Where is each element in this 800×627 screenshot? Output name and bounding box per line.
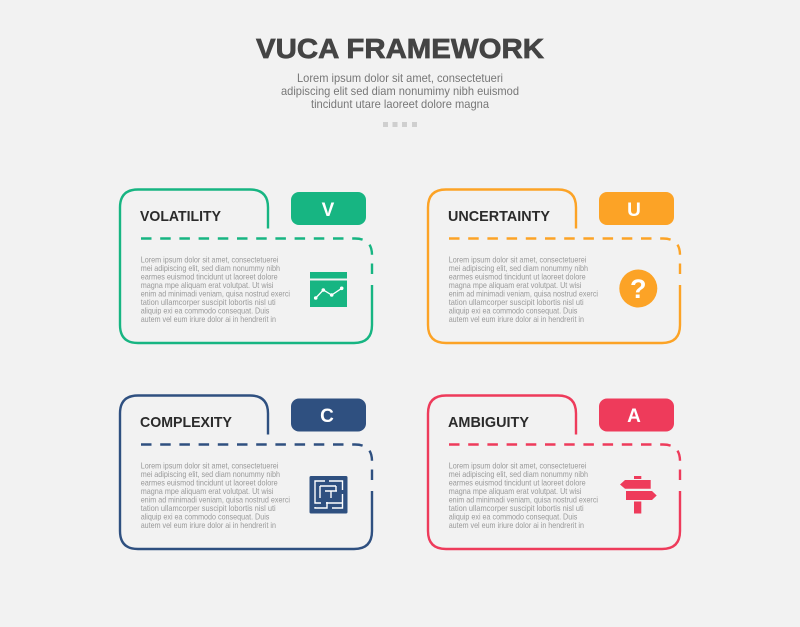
body text: magna mpe aliquam erat volutpat. Ut wisi xyxy=(141,280,274,290)
subtitle text block: adipiscing elit sed diam nonumimy nibh euismod xyxy=(281,84,519,98)
card outline xyxy=(120,190,372,343)
badge U: U xyxy=(627,200,641,221)
body text: enim ad minimadi veniam, quisa nostrud exerci xyxy=(449,494,598,504)
badge A: A xyxy=(627,406,641,427)
pagination dots xyxy=(383,122,417,127)
body text: autem vel eum iriure dolor ai in hendrerit in xyxy=(141,520,276,530)
icon: signpost xyxy=(620,476,657,514)
icon: question mark: ? xyxy=(630,274,647,304)
body text: magna mpe aliquam erat volutpat. Ut wisi xyxy=(449,280,582,290)
panel: volatility xyxy=(120,190,372,343)
heading: AMBIGUITY xyxy=(448,414,529,431)
body text xyxy=(141,254,290,324)
card outline xyxy=(120,396,372,549)
badge U xyxy=(599,192,674,225)
body text: enim ad minimadi veniam, quisa nostrud exerci xyxy=(141,494,290,504)
body text: aliquip exi ea commodo consequat. Duis xyxy=(449,305,577,315)
card outline xyxy=(428,190,680,343)
body text: enim ad minimadi veniam, quisa nostrud exerci xyxy=(141,288,290,298)
body text xyxy=(449,460,598,530)
panel: complexity xyxy=(120,396,372,549)
subtitle text block: tincidunt utare laoreet dolore magna xyxy=(311,97,489,111)
icon: maze xyxy=(310,476,348,514)
heading: VOLATILITY xyxy=(140,208,221,225)
body text: tation ullamcorper suscipit lobortis nisl uti xyxy=(141,297,276,307)
body text: mei adipiscing elit, sed diam nonummy nibh xyxy=(141,263,280,273)
body text: aliquip exi ea commodo consequat. Duis xyxy=(141,305,269,315)
badge C: C xyxy=(320,406,334,427)
panel: uncertainty xyxy=(428,190,680,343)
icon: chart window xyxy=(310,272,347,307)
body text: magna mpe aliquam erat volutpat. Ut wisi xyxy=(141,486,274,496)
body text: autem vel eum iriure dolor ai in hendrerit in xyxy=(449,314,584,324)
body text: Lorem ipsum dolor sit amet, consectetuerei xyxy=(449,254,587,264)
heading: COMPLEXITY xyxy=(140,414,232,431)
badge V: V xyxy=(322,200,335,221)
body text: aliquip exi ea commodo consequat. Duis xyxy=(141,511,269,521)
body text xyxy=(141,460,290,530)
body text: tation ullamcorper suscipit lobortis nisl uti xyxy=(449,503,584,513)
body text: mei adipiscing elit, sed diam nonummy nibh xyxy=(449,263,588,273)
body text: earmes euismod tincidunt ut laoreet dolore xyxy=(141,271,278,281)
body text: mei adipiscing elit, sed diam nonummy nibh xyxy=(141,469,280,479)
body text: Lorem ipsum dolor sit amet, consectetuerei xyxy=(141,460,279,470)
card outline xyxy=(428,396,680,549)
body text: magna mpe aliquam erat volutpat. Ut wisi xyxy=(449,486,582,496)
body text: autem vel eum iriure dolor ai in hendrerit in xyxy=(141,314,276,324)
body text: enim ad minimadi veniam, quisa nostrud exerci xyxy=(449,288,598,298)
body text: autem vel eum iriure dolor ai in hendrerit in xyxy=(449,520,584,530)
heading: UNCERTAINTY xyxy=(448,208,550,225)
body text xyxy=(449,254,598,324)
body text: earmes euismod tincidunt ut laoreet dolore xyxy=(141,477,278,487)
panel: ambiguity xyxy=(428,396,680,549)
body text: mei adipiscing elit, sed diam nonummy nibh xyxy=(449,469,588,479)
badge A xyxy=(599,398,674,432)
body text: tation ullamcorper suscipit lobortis nisl uti xyxy=(141,503,276,513)
subtitle text block xyxy=(281,71,519,111)
icon: question mark xyxy=(619,270,657,308)
body text: Lorem ipsum dolor sit amet, consectetuerei xyxy=(449,460,587,470)
body text: tation ullamcorper suscipit lobortis nisl uti xyxy=(449,297,584,307)
badge V xyxy=(291,192,366,225)
body text: Lorem ipsum dolor sit amet, consectetuerei xyxy=(141,254,279,264)
body text: earmes euismod tincidunt ut laoreet dolore xyxy=(449,477,586,487)
title: VUCA FRAMEWORK xyxy=(256,33,544,64)
body text: earmes euismod tincidunt ut laoreet dolore xyxy=(449,271,586,281)
badge C xyxy=(291,398,366,432)
subtitle text block: Lorem ipsum dolor sit amet, consectetueri xyxy=(297,71,503,85)
body text: aliquip exi ea commodo consequat. Duis xyxy=(449,511,577,521)
